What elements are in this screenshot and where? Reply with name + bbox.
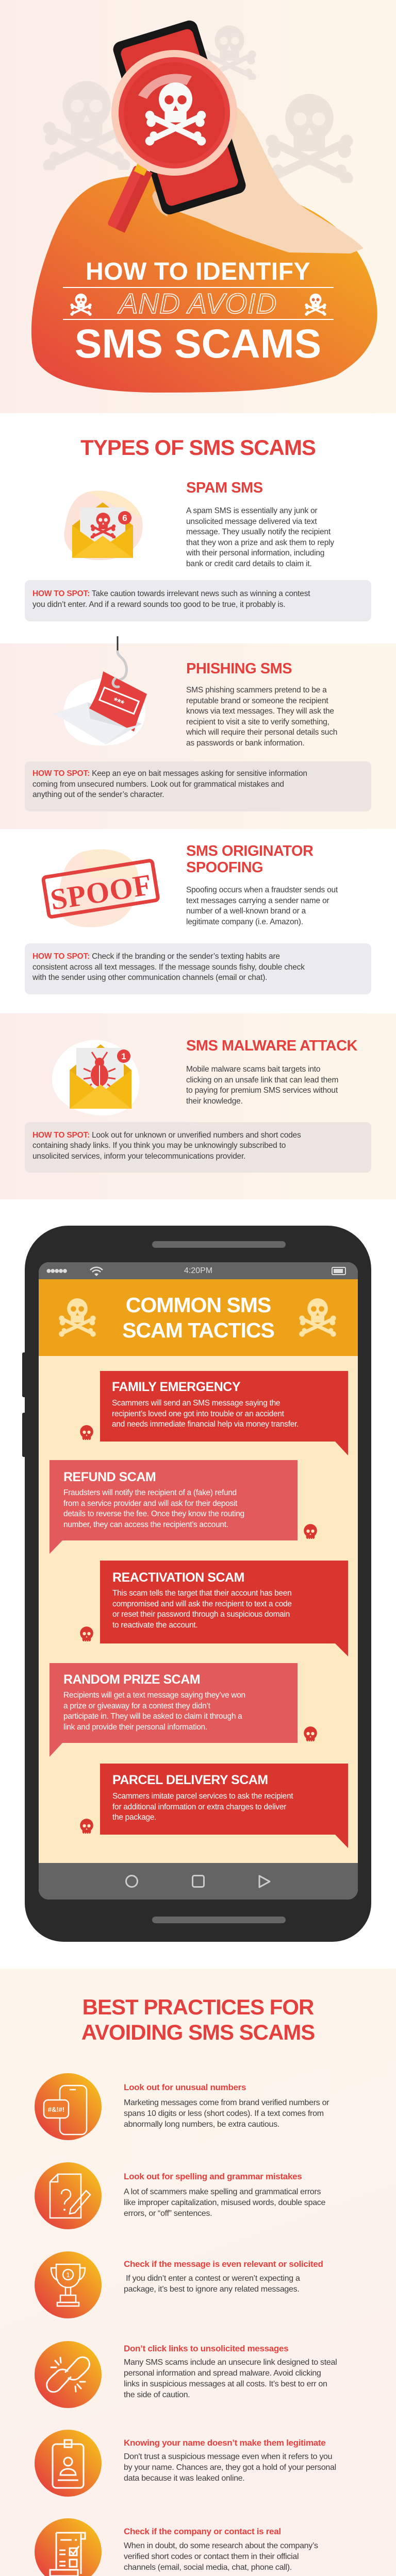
item: spelling and grammar: like improper capitalization, misused words, double space	[124, 2198, 325, 2207]
item: don't click links: Don’t click links to unsolicited messages	[124, 2344, 288, 2353]
side buttons	[22, 1352, 26, 1397]
text: spoofing description: Spoofing occurs when a fraudster sends out	[186, 886, 338, 894]
bubble: family emergency: FAMILY EMERGENCY	[112, 1380, 240, 1394]
item: company real: When in doubt, do some research about the company’s	[124, 2541, 318, 2550]
icon: checklist scroll	[35, 2518, 102, 2576]
bubble: random prize scam: link and provide their personal information.	[63, 1723, 207, 1732]
phone	[111, 19, 248, 216]
text: phishing description	[186, 686, 337, 748]
heading: best practices: AVOIDING SMS SCAMS	[81, 2020, 315, 2044]
icon: skull reactivation	[80, 1626, 93, 1641]
heading: best practices: BEST PRACTICES FOR	[82, 1995, 314, 2019]
orange blob	[31, 175, 377, 393]
hero illustration	[31, 21, 377, 393]
nav bar	[39, 1863, 358, 1900]
hand	[155, 106, 364, 253]
bubble: parcel delivery scam: PARCEL DELIVERY SCAM	[112, 1773, 268, 1787]
item: don't click links: personal information and spread malware. Avoid clicking	[124, 2369, 321, 2378]
section title: types of sms scams: TYPES OF SMS SCAMS	[80, 435, 316, 460]
icon: document with question and pencil	[35, 2162, 102, 2229]
panel: sms originator spoofing	[41, 843, 338, 927]
heading: best practices	[81, 1995, 315, 2044]
bubble: refund scam: REFUND SCAM	[63, 1470, 156, 1484]
text: spam description: A spam SMS is essentially any junk or	[186, 506, 318, 515]
icon: spoof stamp	[41, 849, 160, 927]
bubble: reactivation scam	[100, 1561, 348, 1656]
item: spelling and grammar: Look out for spelling and grammar mistakes	[124, 2172, 302, 2181]
callout: phishing how to spot: HOW TO SPOT: Keep an eye on bait messages asking for sensitive information	[32, 769, 307, 778]
icon: phishing hook envelope	[55, 636, 147, 745]
heading: spoofing: SPOOFING	[186, 859, 263, 876]
callout: phishing how to spot	[25, 761, 371, 811]
bubble: reactivation scam: This scam tells the target that their account has been	[112, 1589, 291, 1598]
icon: id badge	[35, 2430, 102, 2497]
icon: phone with symbols	[35, 2073, 102, 2140]
callout: spam how to spot	[25, 580, 371, 621]
bubble: random prize scam: participate in. They will be asked to claim it through a	[63, 1712, 242, 1721]
icon: skull random prize	[304, 1726, 317, 1741]
item: spelling and grammar: A lot of scammers make spelling and grammatical errors	[124, 2188, 321, 2196]
panel: spam sms	[64, 480, 334, 568]
item: relevant or solicited: If you didn’t enter a contest or weren’t expecting a	[126, 2274, 300, 2283]
callout: phishing how to spot: anything out of the sender’s character.	[32, 790, 164, 799]
bubble: random prize scam: Recipients will get a text message saying they’ve won	[63, 1691, 245, 1700]
heading: malware: SMS MALWARE ATTACK	[186, 1038, 357, 1054]
bubble: reactivation scam: compromised and will ask the recipient to text a code	[112, 1600, 292, 1608]
item: knowing your name: data because it was leaked online.	[124, 2474, 244, 2483]
bubble: refund scam: from a service provider and will ask for their deposit	[63, 1499, 237, 1508]
item: unusual numbers	[35, 2073, 329, 2140]
item: company real	[35, 2518, 318, 2576]
text: spam description	[186, 506, 334, 568]
bubble: random prize scam: a prize or giveaway for a contest they didn’t	[63, 1702, 210, 1710]
callout: spam how to spot: HOW TO SPOT: Take caution towards irrelevant news such as winning a contest	[32, 589, 310, 598]
item: knowing your name: Knowing your name doesn’t make them legitimate	[124, 2438, 325, 2448]
status bar: 4:20PM	[184, 1266, 212, 1275]
background skulls	[43, 25, 353, 185]
text: spoofing description: number of a well-known brand or a	[186, 907, 306, 916]
icon: spoof stamp: SPOOF	[48, 868, 154, 917]
text: phishing description: knows via text messages. They will ask the	[186, 707, 334, 716]
item: knowing your name: by your name. Chances are, they got a hold of your personal	[124, 2463, 336, 2472]
text: spam description: bank or credit card details to claim it.	[186, 560, 312, 568]
bubble: refund scam: Fraudsters will notify the recipient of a (fake) refund	[63, 1488, 237, 1497]
item: spelling and grammar	[35, 2162, 325, 2229]
item: company real: verified short codes or contact them in their official	[124, 2552, 299, 2561]
item: unusual numbers: Look out for unusual numbers	[124, 2082, 246, 2092]
bubble: reactivation scam: to reactivate the account.	[112, 1621, 197, 1630]
magnifier	[107, 50, 237, 233]
item: don't click links: Many SMS scams include an unsecure link designed to steal	[124, 2358, 337, 2367]
text: spam description: that they won a prize and ask them to reply	[186, 538, 334, 547]
text: spam description: with their personal information, including	[186, 549, 324, 557]
skull icons beside AND AVOID	[70, 294, 92, 316]
hero title: SMS SCAMS	[75, 320, 321, 366]
text: malware description: their knowledge.	[186, 1097, 243, 1106]
tactics header: SCAM TACTICS	[122, 1318, 274, 1342]
item: don't click links	[35, 2341, 337, 2408]
heading: spoofing	[186, 843, 314, 876]
bubble: random prize scam: RANDOM PRIZE SCAM	[63, 1672, 200, 1687]
bubble: refund scam: number, they can access the recipient’s account.	[63, 1520, 228, 1529]
text: malware description: Mobile malware scams bait targets into	[186, 1065, 320, 1074]
tactics header: COMMON SMS	[126, 1293, 271, 1317]
bubble: refund scam	[50, 1460, 298, 1554]
bubble: family emergency: Scammers will send an SMS message saying the	[112, 1399, 280, 1408]
bubble: family emergency: and needs immediate financial help via money transfer.	[112, 1420, 299, 1429]
callout: spoofing how to spot: with the sender using other communication channels (email or chat).	[32, 973, 267, 982]
icon: skull family	[80, 1425, 93, 1440]
bubble: reactivation scam: or reset their password through a suspicious domain	[112, 1610, 290, 1619]
item: company real: Check if the company or contact is real	[124, 2527, 281, 2536]
screen	[39, 1262, 358, 1900]
heading: spam sms: SPAM SMS	[186, 480, 263, 496]
callout: spoofing how to spot	[25, 943, 371, 994]
text: phishing description: as passwords or bank information.	[186, 739, 304, 748]
text: phishing description: SMS phishing scammers pretend to be a	[186, 686, 327, 694]
bubble: reactivation scam: REACTIVATION SCAM	[112, 1570, 244, 1585]
item: relevant or solicited: Check if the message is even relevant or solicited	[124, 2259, 323, 2269]
text: malware description: clicking on an unsafe link that can lead them	[186, 1076, 338, 1084]
bubble: parcel delivery scam: for additional information or extra charges to deliver	[112, 1803, 286, 1811]
item: knowing your name	[35, 2430, 336, 2497]
item: knowing your name: Don't trust a suspicious message even when it refers to you	[124, 2452, 332, 2461]
icon: trophy: 1	[66, 2271, 70, 2279]
item: company real: channels (email, social media, chat, phone call).	[124, 2563, 292, 2572]
callout: malware how to spot: containing shady links. If you think you may be unknowingly subscribed to	[32, 1141, 286, 1150]
callout: malware how to spot: unsolicited services, inform your telecommunications provider.	[32, 1152, 245, 1161]
text: spoofing description: text messages carrying a sender name or	[186, 896, 329, 905]
icon: envelope with skull: 6	[122, 513, 127, 523]
status bar: ●●●●●	[46, 1265, 66, 1276]
bubble: parcel delivery scam: the package.	[112, 1813, 156, 1822]
tactics header	[39, 1279, 358, 1356]
callout: spoofing how to spot: consistent across all text messages. If the message sounds fishy, double check	[32, 963, 305, 972]
item: spelling and grammar: errors, or “off” sentences.	[124, 2209, 212, 2218]
text: spoofing description: legitimate company (i.e. Amazon).	[186, 918, 303, 926]
text: spam description: unsolicited message delivered via text	[186, 517, 317, 526]
bubble: parcel delivery scam	[100, 1764, 348, 1848]
hero title: HOW TO IDENTIFY	[86, 258, 310, 285]
bubble: family emergency: recipient’s loved one got into trouble or an accident	[112, 1410, 284, 1418]
icon: skull parcel	[80, 1819, 93, 1834]
bubble: family emergency	[100, 1371, 348, 1455]
icon: phishing hook envelope: ***	[111, 696, 125, 709]
callout: spoofing how to spot: HOW TO SPOT: Check if the branding or the sender’s texting habits are	[32, 952, 280, 961]
hero title	[63, 258, 334, 366]
item: unusual numbers: Marketing messages come from brand verified numbers or	[124, 2098, 329, 2107]
panel: phishing sms	[0, 643, 396, 829]
panel: sms malware attack	[0, 1013, 396, 1199]
item: unusual numbers: abnormally long numbers, be extra cautious.	[124, 2120, 279, 2129]
text: spoofing description	[186, 886, 338, 926]
panel: common sms scam tactics phone	[22, 1226, 371, 1942]
icon: skull refund	[304, 1524, 317, 1539]
item: relevant or solicited: package, it’s best to ignore any related messages.	[124, 2285, 299, 2294]
bubble: random prize scam	[50, 1663, 298, 1757]
bubble: parcel delivery scam: Scammers imitate parcel services to ask the recipient	[112, 1792, 293, 1801]
text: spam description: message. They usually notify the recipient	[186, 528, 331, 536]
status bar	[39, 1262, 358, 1279]
icon: phone with symbols: #&!#!	[48, 2106, 64, 2113]
bubble: refund scam: details to reverse the fee. Once they know the routing	[63, 1510, 244, 1518]
text: phishing description: reputable brand or someone the recipient	[186, 697, 328, 705]
icon: envelope with skull	[64, 490, 143, 561]
item: don't click links: the side of caution.	[124, 2391, 190, 2399]
text: phishing description: which will require their personal details such	[186, 728, 337, 737]
item: relevant or solicited	[35, 2251, 323, 2318]
icon: envelope with bug	[52, 1040, 139, 1115]
icon: envelope with bug: 1	[121, 1052, 126, 1061]
icon: broken chain link	[35, 2341, 102, 2408]
heading: spoofing: SMS ORIGINATOR	[186, 843, 314, 859]
phone body	[25, 1226, 371, 1942]
hero section	[0, 0, 396, 413]
panel: best practices	[0, 1969, 396, 2576]
text: malware description: to paying for premium SMS services without	[186, 1086, 338, 1095]
callout: malware how to spot	[25, 1122, 371, 1173]
item: unusual numbers: spans 10 digits or less (short codes). If a text comes from	[124, 2109, 324, 2118]
icon: trophy	[35, 2251, 102, 2318]
callout: phishing how to spot: coming from unsecured numbers. Look out for grammatical mistakes and	[32, 780, 284, 789]
heading: phishing sms: PHISHING SMS	[186, 660, 292, 677]
item: don't click links: links in suspicious messages at all costs. It’s best to err on	[124, 2380, 327, 2388]
callout: malware how to spot: HOW TO SPOT: Look out for unknown or unverified numbers and short codes	[32, 1131, 301, 1140]
callout: spam how to spot: you didn’t enter. And if a reward sounds too good to be true, it probably is.	[32, 600, 285, 609]
text: malware description	[186, 1065, 338, 1106]
text: phishing description: recipient to visit a site to verify something,	[186, 718, 329, 726]
